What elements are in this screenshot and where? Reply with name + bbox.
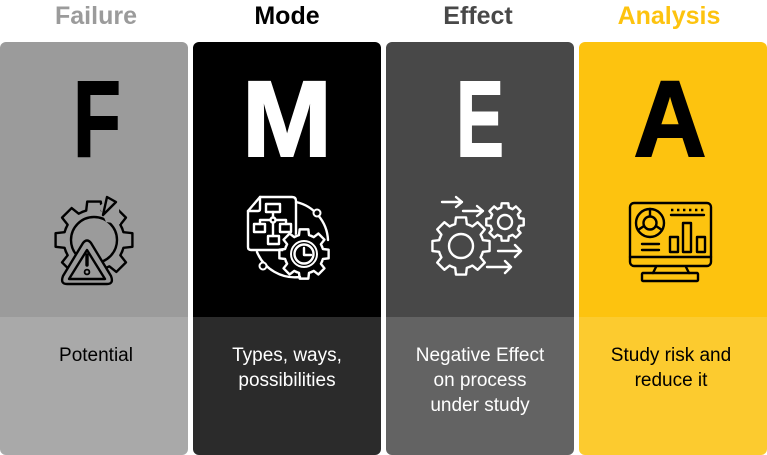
icon: gears and arrows [432, 197, 524, 275]
body text: Negative Effect on process under study: on process [434, 370, 526, 391]
panel bottom: Failure [0, 317, 188, 455]
body text: Study risk and reduce it: reduce it [635, 370, 708, 391]
letter A: A [634, 60, 706, 180]
body text: Types, ways, possibilities: possibilities [238, 370, 336, 391]
body text: Potential: Potential [59, 345, 133, 366]
body text: Negative Effect on process under study: under study [430, 395, 530, 416]
body text: Types, ways, possibilities: Types, ways, [232, 345, 342, 366]
letter F: F [73, 58, 121, 179]
body text: Negative Effect on process under study: Negative Effect [416, 345, 545, 366]
panel: Mode [193, 2, 381, 455]
icon: monitor dashboard [630, 203, 711, 281]
panel top: Effect [386, 42, 574, 317]
heading: Effect: Effect [443, 2, 513, 30]
panel bottom: Effect [386, 317, 574, 455]
panel: Failure [0, 2, 188, 455]
icon: flowchart document with gear and clock [248, 197, 329, 279]
panel bottom: Mode [193, 317, 381, 455]
icon: broken gear with warning triangle [56, 194, 132, 286]
body text: Study risk and reduce it: Study risk and [611, 345, 731, 366]
panel top: Failure [0, 42, 188, 317]
panel top: Mode [193, 42, 381, 317]
panel: Effect [386, 2, 574, 455]
panel: Analysis [579, 2, 767, 455]
panel bottom: Analysis [579, 317, 767, 455]
heading: Mode: Mode [254, 2, 320, 30]
panel top: Analysis [579, 42, 767, 317]
heading: Failure: Failure [55, 2, 137, 30]
letter E: E [456, 59, 504, 180]
heading: Analysis: Analysis [618, 2, 720, 30]
letter M: M [242, 58, 332, 179]
